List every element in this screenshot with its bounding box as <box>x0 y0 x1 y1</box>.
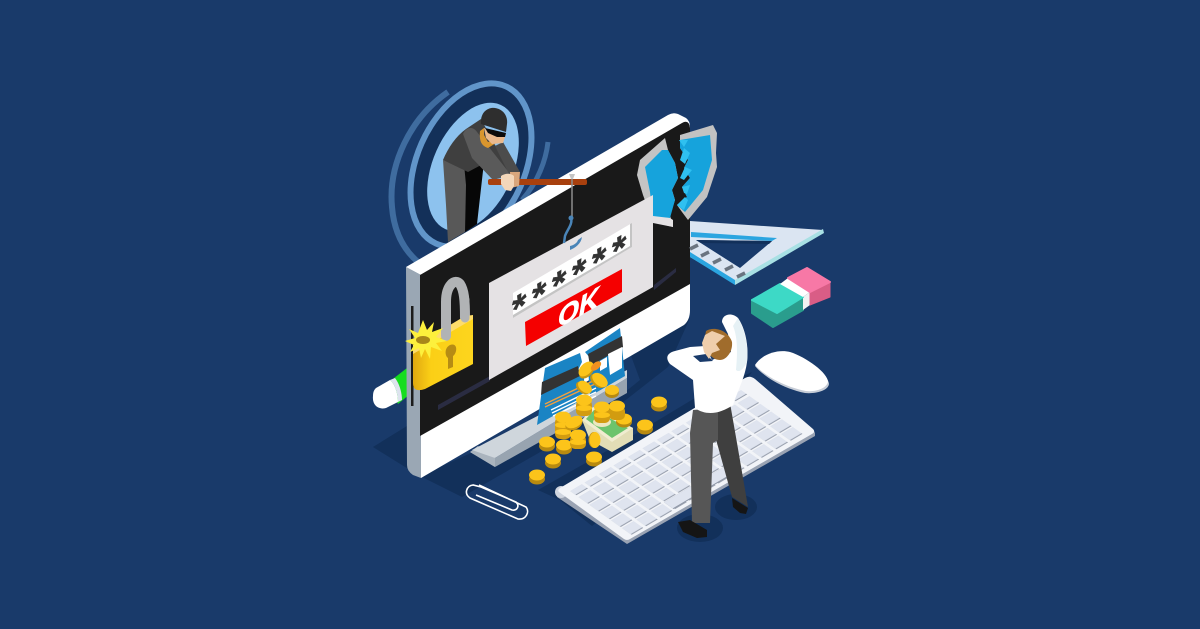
shackle end <box>460 300 470 318</box>
desk shadows <box>373 318 752 526</box>
thief far arm <box>495 142 520 176</box>
shield crack facets <box>677 140 692 210</box>
ok button: OK <box>558 281 600 335</box>
thief dark leg <box>463 153 484 232</box>
ok button <box>525 269 622 346</box>
stressed man <box>667 315 748 538</box>
man near leg <box>690 408 718 523</box>
shield rim <box>653 216 673 227</box>
hook <box>564 218 571 243</box>
eraser <box>752 268 830 327</box>
set square ruler <box>690 221 824 285</box>
monitor frame <box>406 113 690 478</box>
paperclip <box>466 485 528 519</box>
lock body <box>413 315 473 390</box>
ruler opening <box>696 240 772 268</box>
keyboard edge <box>557 432 815 544</box>
thief face <box>484 128 506 144</box>
man hand <box>702 331 725 359</box>
shackle <box>446 282 465 336</box>
login panel <box>489 195 653 380</box>
portal rings <box>387 64 555 266</box>
ruler inner edge <box>691 232 777 241</box>
thief collar <box>480 128 496 148</box>
thief hat <box>481 108 507 132</box>
ruler bottom edge <box>690 252 735 285</box>
flying coins <box>563 359 610 448</box>
thief arm <box>463 128 511 180</box>
shield left half <box>637 138 678 227</box>
side slit <box>411 306 414 406</box>
lock top face <box>413 315 473 354</box>
card chips <box>600 347 622 375</box>
space bar <box>664 462 741 509</box>
monitor side <box>406 267 421 478</box>
thief jacket <box>443 119 517 178</box>
card text lines <box>545 380 597 407</box>
mouse <box>755 351 829 393</box>
money bundle <box>582 407 633 452</box>
monitor <box>406 113 690 478</box>
man far leg <box>710 403 748 507</box>
pen <box>373 368 410 408</box>
fishing rod <box>488 172 587 250</box>
man shirt <box>667 315 748 413</box>
shackle front <box>441 310 451 336</box>
coins <box>529 359 667 484</box>
monitor screen <box>420 122 690 436</box>
thief mask <box>485 128 506 137</box>
ruler ticks <box>690 245 745 277</box>
fishing line <box>571 176 573 218</box>
keyboard <box>555 377 815 544</box>
man neck gap <box>693 354 713 362</box>
screen highlight <box>438 268 676 410</box>
foot shadows <box>677 494 757 542</box>
shield right half <box>677 125 717 220</box>
password asterisks: ****** <box>512 222 632 332</box>
keyboard keys <box>569 388 805 536</box>
ruler outer edge <box>735 229 824 285</box>
thief <box>443 108 520 242</box>
man head <box>702 329 732 360</box>
bullet burst <box>405 320 447 359</box>
thief trousers <box>443 160 473 242</box>
cracked shield <box>637 125 717 227</box>
coin stacks <box>555 394 625 449</box>
man shoes <box>678 520 707 538</box>
broken credit card <box>537 328 625 425</box>
monitor stand <box>470 370 627 467</box>
thief far hand <box>510 172 520 188</box>
password field <box>512 222 632 332</box>
thief hand <box>501 174 514 191</box>
keyhole <box>446 344 456 369</box>
man sleeve shade <box>733 318 748 371</box>
padlock <box>405 282 473 390</box>
keyboard body <box>558 377 814 540</box>
card stripe <box>541 366 580 395</box>
